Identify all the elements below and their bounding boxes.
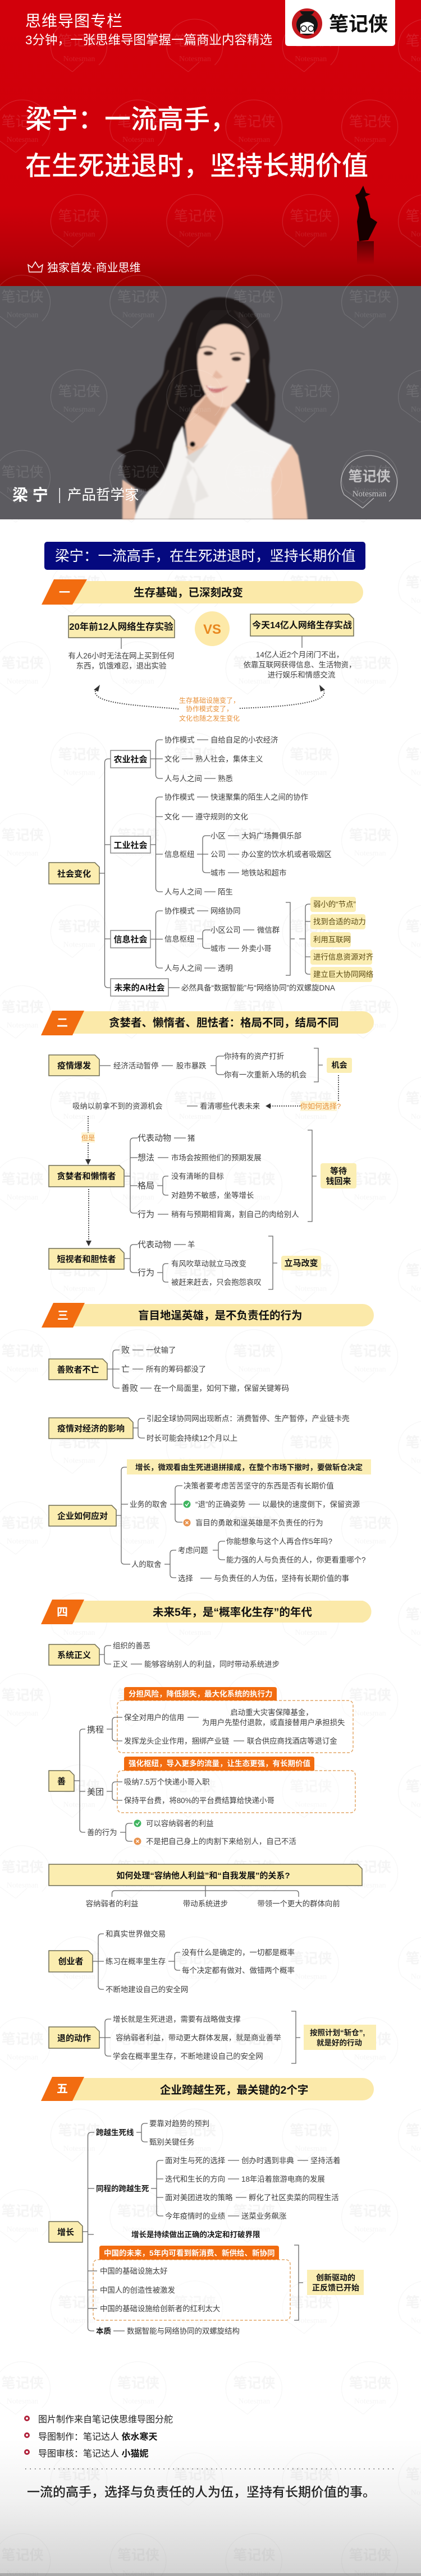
branch: Tongcheng: 面对美团进攻的策略: [165, 2193, 233, 2202]
credit: maker: 导图制作：笔记达人 依水寒天: [38, 2431, 157, 2442]
tag: follow plan: [304, 2025, 376, 2050]
branch: Meituan: [87, 1757, 355, 1813]
branch: people choices: 人的取舍: [131, 1560, 162, 1569]
bracket and highlighted steps: 利用互联网: [313, 936, 351, 944]
text: see the future: 看清哪些代表未来: [200, 1102, 260, 1110]
text: traits: 猪: [187, 1134, 195, 1142]
panel: greedy and lazy: [49, 1130, 356, 1246]
box: 20 years ago experiment: 20年前12人网络生存实验: [69, 621, 173, 632]
section 1 heading: [42, 579, 363, 605]
section 3 heading: 三: [57, 1310, 68, 1322]
main title: 在生死进退时，坚持长期价值: [25, 151, 368, 181]
panel: good at losing: 一仗输了: [146, 1346, 176, 1354]
box: greedy and lazy: 贪婪者和懒惰者: [57, 1171, 116, 1181]
arrow: but: [81, 1116, 95, 1165]
mind map: social change: [49, 736, 373, 996]
box: kindness: 善: [57, 1776, 66, 1786]
text: traits: 有风吹草动就立马改变: [171, 1260, 246, 1268]
section 2 heading: 贪婪者、懒惰者、胆怯者：格局不同，结局不同: [109, 1016, 339, 1029]
box: response: [49, 1505, 116, 1526]
branch: Tongcheng: 送菜业务飙涨: [241, 2212, 286, 2220]
branch: information society: [111, 907, 280, 973]
box: growth: 增长: [57, 2227, 74, 2237]
branch: Tongcheng: 面对生与死的选择: [165, 2156, 226, 2165]
branch: agricultural society: 自给自足的小农经济: [210, 736, 278, 744]
credit: reviewer: 导图审核：笔记达人 小猫妮: [38, 2449, 148, 2459]
branch: Tongcheng: 同程的跨越生死: [96, 2184, 149, 2193]
text: traits: 代表动物: [138, 1133, 171, 1143]
panel: retreat action: 增长就是生死进退，需要有战略做支撑: [113, 2015, 241, 2024]
panel: entrepreneur: 没有什么是确定的，一切都是概率: [182, 1948, 295, 1957]
badge: VS: [195, 611, 230, 646]
panel: self and others question: [49, 1864, 362, 1908]
section 1 heading: 一: [59, 587, 70, 599]
branch: industrial society: 城市: [210, 868, 226, 877]
text: traits: 市场会按照他们的预期发展: [171, 1153, 262, 1162]
main title: [25, 104, 368, 181]
branch: China's future: 中国的基础设施太好: [100, 2266, 168, 2275]
branch: cross life and death: 跨越生死线: [96, 2128, 134, 2137]
branch: kind behaviour: [87, 1819, 296, 1846]
text: real situation: 14亿人近2个月闭门不出，: [256, 651, 344, 659]
branch: business choices: 决策者要考虑苦苦坚守的东西是否有长期价值: [184, 1481, 334, 1490]
panel: self and others question: 如何处理“容纳他人利益”和“自我发展”的关系?: [116, 1870, 290, 1881]
branch: information society: 外卖小哥: [241, 944, 272, 953]
title banner: [44, 542, 365, 570]
statement: growth definition: 增长是持续做出正确的决定和打破界限: [131, 2230, 260, 2239]
text: traits: 行为: [138, 1210, 154, 1219]
tag: positive feedback: [307, 2270, 364, 2295]
arrow: dotted right: [240, 685, 325, 708]
branch: people choices: 你能想象与这个人再合作5年吗?: [226, 1537, 332, 1546]
branch: essence: 数据智能与网络协同的双螺旋结构: [127, 2327, 240, 2335]
branch: Ctrip: 联合供应商找酒店等退订金: [247, 1736, 337, 1745]
panel: system justice: [49, 1642, 280, 1669]
branch: industrial society: 文化: [164, 813, 180, 821]
branch: Meituan: 美团: [87, 1787, 104, 1797]
panel: shortsighted and timid: [49, 1236, 321, 1289]
branch: industrial society: 协作模式: [164, 793, 195, 801]
text: chain: [113, 1052, 306, 1079]
panel: red cover header: [0, 0, 421, 286]
branch: Tongcheng: [96, 2156, 341, 2220]
panel: good at losing: 在一个局面里，如何下撤，保留关键筹码: [154, 1384, 289, 1393]
panel: entrepreneur: [49, 1929, 295, 1994]
box: outbreak: 疫情爆发: [57, 1061, 91, 1071]
tag: follow plan: 就是好的行动: [317, 2038, 362, 2047]
branch: business choices: 业务的取舍: [130, 1500, 167, 1509]
title banner: 梁宁：一流高手，在生死进退时，坚持长期价值: [55, 549, 356, 564]
branch: people choices: 能力强的人与负责任的人，你更看重哪个?: [226, 1556, 365, 1564]
panel: good at losing: 败: [121, 1345, 130, 1355]
panel: outbreak chain: [49, 1048, 352, 1165]
panel: retreat action: 容纳弱者利益，带动更大群体发展，就是商业善举: [116, 2033, 281, 2042]
branch: agricultural society: 文化: [164, 755, 180, 763]
closing statement: 一流的高手，选择与负责任的人为伍，坚持有长期价值的事。: [27, 2485, 376, 2499]
text: traits: 代表动物: [138, 1240, 171, 1250]
branch: industrial society: 地铁站和超市: [241, 868, 286, 877]
branch: business choices: 以最快的速度倒下，保留资源: [262, 1500, 360, 1509]
section 4 heading: [41, 1600, 372, 1624]
text: traits: 被赶来赶去，只会抱怨哀叹: [171, 1278, 262, 1287]
bracket and highlighted steps: 弱小的“节点”: [313, 900, 356, 909]
illustration: woman portrait: [117, 297, 308, 519]
section 1 heading: 生存基础，已深刻改变: [134, 586, 243, 599]
text: traits: [138, 1240, 262, 1287]
branch: Ctrip: 保全对用户的信用: [124, 1713, 184, 1722]
text: experiment result: 有人26小时无法在网上买到任何: [68, 652, 174, 660]
branch: Tongcheng: 创办时遇到非典: [241, 2156, 294, 2165]
branch: Tongcheng: 坚持活着: [310, 2156, 341, 2165]
branch: business choices: 盲目的勇敢和逞英雄是不负责任的行为: [195, 1518, 323, 1527]
panel: self and others question: 带动系统进步: [183, 1900, 228, 1908]
branch: kind behaviour: 不是把自己身上的肉割下来给别人，自己不活: [146, 1837, 296, 1846]
box: 20 years ago experiment: [68, 616, 175, 638]
branch: future AI society: [111, 979, 335, 996]
arrow: dotted to shortsighted: [86, 1189, 91, 1246]
panel: economic impact: 疫情对经济的影响: [57, 1423, 125, 1434]
section 4 heading: 四: [57, 1606, 68, 1619]
panel: good at losing: 亡: [121, 1365, 130, 1374]
branch: Tongcheng: 孵化了社区卖菜的同程生活: [249, 2193, 339, 2202]
text: traits: 格局: [138, 1181, 154, 1191]
branch: information society: 人与人之间: [164, 964, 202, 973]
silhouette: swordsman figure: [355, 186, 377, 265]
box: today experiment: 今天14亿人网络生存实战: [252, 620, 352, 630]
branch: Ctrip: [87, 1687, 353, 1753]
branch: Meituan: 保持平台费，将80%的平台费结算给快递小哥: [124, 1796, 274, 1805]
branch: kind behaviour: 善的行为: [87, 1828, 117, 1837]
panel: system justice: 组织的善恶: [113, 1642, 150, 1650]
branch: information society: 协作模式: [164, 907, 195, 915]
branch: Ctrip: 分担风险，降低损失，最大化系统的执行力: [129, 1689, 273, 1698]
icon: notesman logo: [292, 8, 322, 39]
branch: information society: 小区公司: [210, 926, 241, 934]
panel: good at losing: 善败: [121, 1384, 138, 1393]
tag: positive feedback: 创新驱动的: [316, 2273, 355, 2282]
bracket and highlighted steps: 找到合适的动力: [313, 918, 366, 926]
box: today experiment: [250, 614, 354, 636]
branch: business choices: “退”的正确姿势: [195, 1500, 245, 1509]
tag: opportunity: [327, 1058, 352, 1073]
arrow: choice: 你如何选择?: [300, 1102, 341, 1110]
logo wordmark: 笔记侠: [329, 13, 388, 35]
box: kindness: [49, 1771, 74, 1791]
panel: system justice: 系统正义: [57, 1650, 91, 1660]
panel: comparison: [68, 611, 356, 722]
box: shortsighted and timid: 短视者和胆怯者: [57, 1254, 116, 1264]
panel: growth: [49, 2119, 364, 2335]
tag: change at once: 立马改变: [284, 1258, 318, 1268]
tag: wait for money: 钱回来: [326, 1176, 351, 1186]
panel: entrepreneur: 练习在概率里生存: [106, 1957, 166, 1966]
panel: entrepreneur: 每个决定都有做对、做错两个概率: [182, 1966, 295, 1975]
text: chain: 你有一次重新入场的机会: [224, 1071, 306, 1079]
panel: self and others question: 容纳弱者的利益: [86, 1899, 138, 1908]
panel: portrait photo: [0, 286, 421, 519]
speaker caption: 梁 宁: [12, 486, 48, 504]
branch: Tongcheng: 18年沿着旅游电商的发展: [241, 2174, 325, 2183]
branch: China's future: 中国的未来，5年内可看到新消费、新供给、新协同: [104, 2248, 275, 2257]
box: shortsighted and timid: [49, 1248, 124, 1269]
root: social change: 社会变化: [57, 869, 91, 879]
tag: growth statement: 增长，微观看由生死进退拼接成，在整个市场下撤时，要做斩仓决定: [135, 1463, 363, 1472]
branch: industrial society: 办公室的饮水机或者吸烟区: [241, 850, 332, 859]
branch: industrial society: 人与人之间: [164, 888, 202, 896]
text: experiment result: [68, 652, 174, 670]
panel: good at losing: [49, 1345, 289, 1393]
branch: industrial society: 遵守规则的文化: [195, 812, 248, 821]
credit: source: 图片制作来自笔记侠思维导图分舵: [38, 2414, 173, 2425]
text: traits: 稍有与预期相背离，割自己的肉给别人: [171, 1210, 299, 1219]
section 4 heading: 未来5年，是“概率化生存”的年代: [153, 1606, 312, 1619]
branch: Tongcheng: 今年疫情时的业绩: [165, 2212, 225, 2220]
branch: people choices: 与负责任的人为伍，坚持有长期价值的事: [214, 1574, 349, 1583]
text: traits: 对趋势不敏感，坐等增长: [171, 1191, 254, 1200]
panel: retreat action: 退的动作: [57, 2033, 91, 2043]
branch: future AI society: 必然具备“数据智能”与“网络协同”的双螺旋DNA: [181, 983, 335, 992]
panel: system justice: 能够容纳别人的利益，同时带动系统进步: [144, 1660, 280, 1669]
speaker caption: 产品哲学家: [67, 487, 139, 503]
text: real situation: [244, 651, 356, 679]
icon: cross: [183, 1519, 191, 1527]
branch: agricultural society: [111, 736, 278, 783]
branch: agricultural society: 人与人之间: [164, 775, 202, 783]
box: outbreak: [49, 1055, 99, 1076]
panel: entrepreneur: 和真实世界做交易: [106, 1929, 166, 1938]
branch: industrial society: 快速聚集的陌生人之间的协作: [210, 793, 308, 801]
branch: Tongcheng: 迭代和生长的方向: [165, 2175, 225, 2183]
branch: Meituan: 吸纳7.5万个快递小哥入职: [124, 1778, 210, 1786]
logo card: [285, 0, 395, 46]
text: chain: 股市暴跌: [176, 1061, 207, 1070]
credits: [25, 2414, 173, 2459]
tag: positive feedback: 正反馈已开始: [312, 2283, 359, 2292]
branch: kind behaviour: 可以容纳弱者的利益: [146, 1819, 214, 1828]
branch: China's future: 中国人的创造性被激发: [100, 2286, 175, 2294]
branch: information society: 信息社会: [113, 934, 148, 944]
main title: 梁宁：一流高手，: [25, 104, 236, 134]
branch: industrial society: 信息枢纽: [164, 850, 195, 859]
column label: 思维导图专栏: [25, 12, 123, 30]
branch: industrial society: 陌生: [218, 888, 233, 896]
panel: entrepreneur: 创业者: [58, 1956, 84, 1966]
tag: opportunity: 机会: [331, 1061, 347, 1070]
box: greedy and lazy: [49, 1165, 124, 1187]
text: see the future: 吸纳以前拿不到的资源机会: [72, 1102, 163, 1110]
text: chain: 你持有的资产打折: [224, 1052, 284, 1061]
tag: wait for money: [321, 1163, 356, 1188]
branch: industrial society: 大妈广场舞俱乐部: [241, 832, 301, 840]
branch: agricultural society: 农业社会: [113, 754, 148, 764]
text: traits: 行为: [138, 1268, 154, 1278]
panel: kindness: [49, 1687, 355, 1846]
section 3 heading: [42, 1303, 374, 1328]
branch: industrial society: [111, 793, 332, 896]
arrow: choice: [266, 1075, 341, 1111]
text: traits: 想法: [138, 1153, 154, 1163]
section 2 heading: [41, 1011, 374, 1035]
text: real situation: 依靠互联网获得信息、生活物资，: [244, 660, 356, 669]
box: growth: [49, 2222, 83, 2242]
panel: economic impact: [49, 1414, 350, 1443]
note: conclusion: 协作模式变了，: [186, 704, 233, 713]
text: see the future: [72, 1102, 260, 1110]
section 5 heading: 五: [57, 2083, 68, 2095]
bracket and highlighted steps: [286, 897, 373, 982]
panel: good at losing: 善败者不亡: [57, 1365, 99, 1375]
text: chain: 经济活动暂停: [113, 1061, 158, 1070]
tagline: 独家首发·商业思维: [47, 261, 141, 274]
branch: information society: 透明: [218, 964, 233, 973]
text: experiment result: 东西，饥饿难忍，退出实验: [76, 662, 167, 670]
box: response: 企业如何应对: [57, 1511, 108, 1521]
branch: people choices: [131, 1537, 365, 1583]
panel: retreat action: 学会在概率里生存，不断地建设自己的安全网: [113, 2052, 263, 2061]
branch: Ctrip: 携程: [87, 1725, 104, 1735]
branch: future AI society: 未来的AI社会: [114, 983, 165, 993]
section 3 heading: 盲目地逞英雄，是不负责任的行为: [138, 1309, 303, 1322]
bracket and highlighted steps: 进行信息资源对齐: [313, 952, 373, 961]
branch: China's future: [88, 2245, 303, 2320]
section 5 heading: [41, 2077, 374, 2101]
text: traits: 羊: [187, 1241, 195, 1249]
icon: check: [183, 1501, 191, 1508]
tag: follow plan: 按照计划“斩仓”,: [310, 2028, 365, 2037]
branch: industrial society: 公司: [210, 850, 226, 859]
note: conclusion: 文化也随之发生变化: [179, 714, 240, 722]
arrow: but: 但是: [81, 1134, 95, 1142]
bright watermark on photo: Notesman: [353, 490, 387, 499]
root: social change: [49, 863, 99, 884]
branch: industrial society: 小区: [210, 832, 226, 840]
bright watermark on photo: [341, 455, 397, 508]
branch: Ctrip: 发挥龙头企业作用，捆绑产业链: [124, 1736, 230, 1745]
panel: system justice: 正义: [113, 1660, 128, 1669]
branch: agricultural society: 熟人社会，集体主义: [195, 755, 263, 763]
branch: information society: 网络协同: [210, 907, 241, 915]
arrow: dotted left: [94, 685, 179, 709]
panel: enterprise response: [49, 1459, 371, 1583]
tag: growth statement: [127, 1459, 371, 1474]
section 2 heading: 二: [57, 1017, 68, 1029]
branch: Meituan: 强化枢纽，导入更多的流量，让生态更强，有长期价值: [129, 1759, 310, 1768]
tag: wait for money: 等待: [330, 1166, 347, 1176]
branch: agricultural society: 协作模式: [164, 736, 195, 744]
panel: good at losing: 所有的筹码都没了: [146, 1365, 206, 1374]
branch: Ctrip: 为用户先垫付退款，或直接替用户承担损失: [202, 1718, 345, 1727]
note: conclusion: 生存基础设施变了，: [179, 696, 240, 704]
branch: people choices: 考虑问题: [178, 1546, 208, 1555]
branch: business choices: [130, 1481, 360, 1527]
panel: self and others question: 带领一个更大的群体向前: [257, 1899, 340, 1908]
branch: information society: 微信群: [257, 926, 280, 934]
speaker caption: [12, 486, 139, 504]
branch: information society: 信息枢纽: [164, 934, 195, 943]
branch: cross life and death: 要靠对趋势的预判: [149, 2119, 209, 2128]
panel: economic impact: 引起全球协同网出现断点：消费暂停、生产暂停，产业链卡壳: [147, 1414, 350, 1423]
text: traits: [138, 1133, 299, 1219]
bright watermark on photo: 笔记侠: [348, 469, 391, 485]
panel: retreat action: [49, 2011, 376, 2063]
badge: VS: VS: [203, 622, 221, 637]
text: traits: 没有清晰的目标: [171, 1172, 224, 1181]
section 5 heading: 企业跨越生死，最关键的2个字: [160, 2084, 308, 2096]
branch: cross life and death: 甄别关键任务: [149, 2138, 194, 2146]
branch: people choices: 选择: [178, 1574, 193, 1583]
branch: cross life and death: [96, 2119, 209, 2146]
column subtitle: 3分钟，一张思维导图掌握一篇商业内容精选: [25, 33, 272, 47]
note: conclusion: [179, 696, 240, 722]
icon: crown: [28, 262, 43, 272]
text: real situation: 进行娱乐和情感交流: [268, 670, 335, 679]
branch: essence: 本质: [96, 2326, 111, 2335]
panel: economic impact: 时长可能会持续12个月以上: [147, 1434, 237, 1443]
branch: industrial society: 工业社会: [113, 840, 148, 850]
branch: information society: 城市: [210, 944, 226, 953]
branch: China's future: 中国的基础设施给创新者的红利太大: [100, 2304, 220, 2313]
panel: entrepreneur: 不断地建设自己的安全网: [106, 1985, 188, 1994]
bracket and highlighted steps: 建立巨大协同网络: [313, 970, 373, 979]
tag: change at once: [281, 1256, 321, 1270]
branch: Ctrip: 启动重大灾害保障基金，: [230, 1708, 313, 1717]
branch: agricultural society: 熟悉: [218, 775, 233, 783]
